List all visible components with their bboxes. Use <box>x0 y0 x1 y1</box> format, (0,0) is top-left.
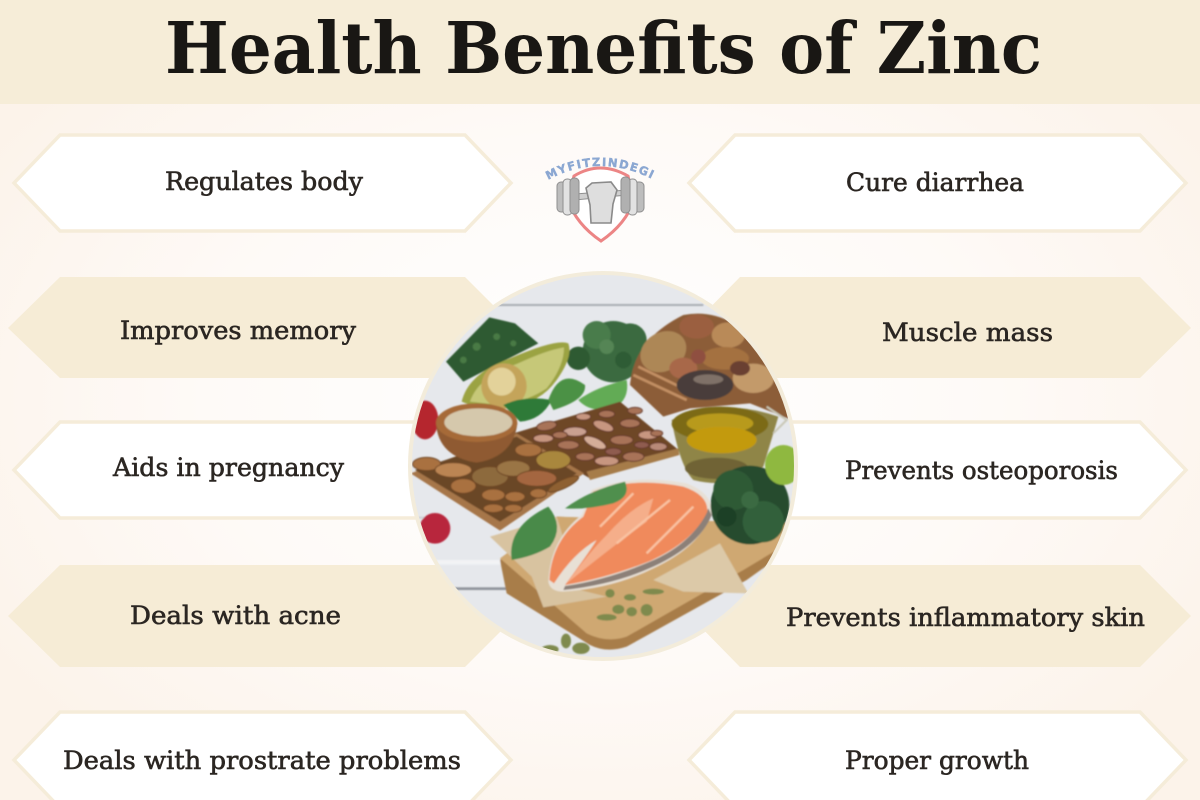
benefit: muscle mass <box>690 277 1191 378</box>
pumpkin seeds <box>541 589 664 654</box>
broccoli top <box>567 321 647 382</box>
nuts tray <box>630 314 792 420</box>
benefit: improves memory <box>8 277 516 378</box>
wood table planks <box>400 304 703 590</box>
photo contents <box>412 275 794 657</box>
avocado skin <box>446 317 538 382</box>
left column benefits <box>8 135 516 800</box>
benefit: proper growth <box>689 712 1186 800</box>
food photo circle <box>400 260 810 670</box>
logo wordmark: MYFITZINDEGI <box>545 157 654 180</box>
beans tray <box>513 402 679 478</box>
mixed nuts <box>633 315 774 400</box>
benefit: prevents osteoporosis <box>689 422 1186 518</box>
benefit: deals with acne: Deals with acne <box>130 601 341 630</box>
title: Health Benefits of Zinc <box>165 6 1042 90</box>
spinach leaves <box>503 378 627 422</box>
benefit: prevents inflammatory skin <box>690 565 1191 667</box>
broccoli lower <box>711 466 789 544</box>
benefit: cure diarrhea: Cure diarrhea <box>846 168 1024 197</box>
benefit: aids in pregnancy: Aids in pregnancy <box>112 453 345 482</box>
spinach on board <box>511 507 557 560</box>
header band <box>0 0 1200 104</box>
grain bowl <box>436 423 517 463</box>
benefit: cure diarrhea <box>689 135 1186 231</box>
benefit: prostrate problems: Deals with prostrate problems <box>63 746 461 775</box>
benefit: regulates body: Regulates body <box>165 167 364 196</box>
benefit: prevents inflammatory skin: Prevents inflammatory skin <box>786 603 1145 632</box>
benefit: improves memory: Improves memory <box>120 316 357 345</box>
benefit: regulates body <box>14 135 511 231</box>
olive oil glass <box>672 407 778 483</box>
right column benefits <box>689 135 1191 800</box>
lettuce <box>764 444 794 486</box>
spinach on salmon <box>565 482 627 509</box>
benefit: prostrate problems <box>14 712 511 800</box>
benefit: deals with acne <box>8 565 516 667</box>
logo shield <box>568 168 634 241</box>
benefit: proper growth: Proper growth <box>845 746 1029 775</box>
benefit: prevents osteoporosis: Prevents osteoporosis <box>845 456 1118 485</box>
logo dumbbell <box>557 177 644 215</box>
wooden board <box>500 517 793 650</box>
raspberry behind bowl <box>412 401 438 439</box>
salmon steak <box>548 480 712 592</box>
logo <box>545 157 654 243</box>
raspberry <box>420 513 450 544</box>
avocado flesh <box>462 342 569 408</box>
almond and walnut tray <box>411 433 584 531</box>
benefit: muscle mass: Muscle mass <box>882 318 1053 347</box>
logo fist <box>586 182 617 223</box>
beans <box>533 407 667 466</box>
photo ring <box>408 271 798 661</box>
avocado pit <box>481 363 527 409</box>
parchment paper <box>490 517 607 607</box>
almonds and walnuts <box>413 443 580 513</box>
benefit: aids in pregnancy <box>14 422 511 518</box>
